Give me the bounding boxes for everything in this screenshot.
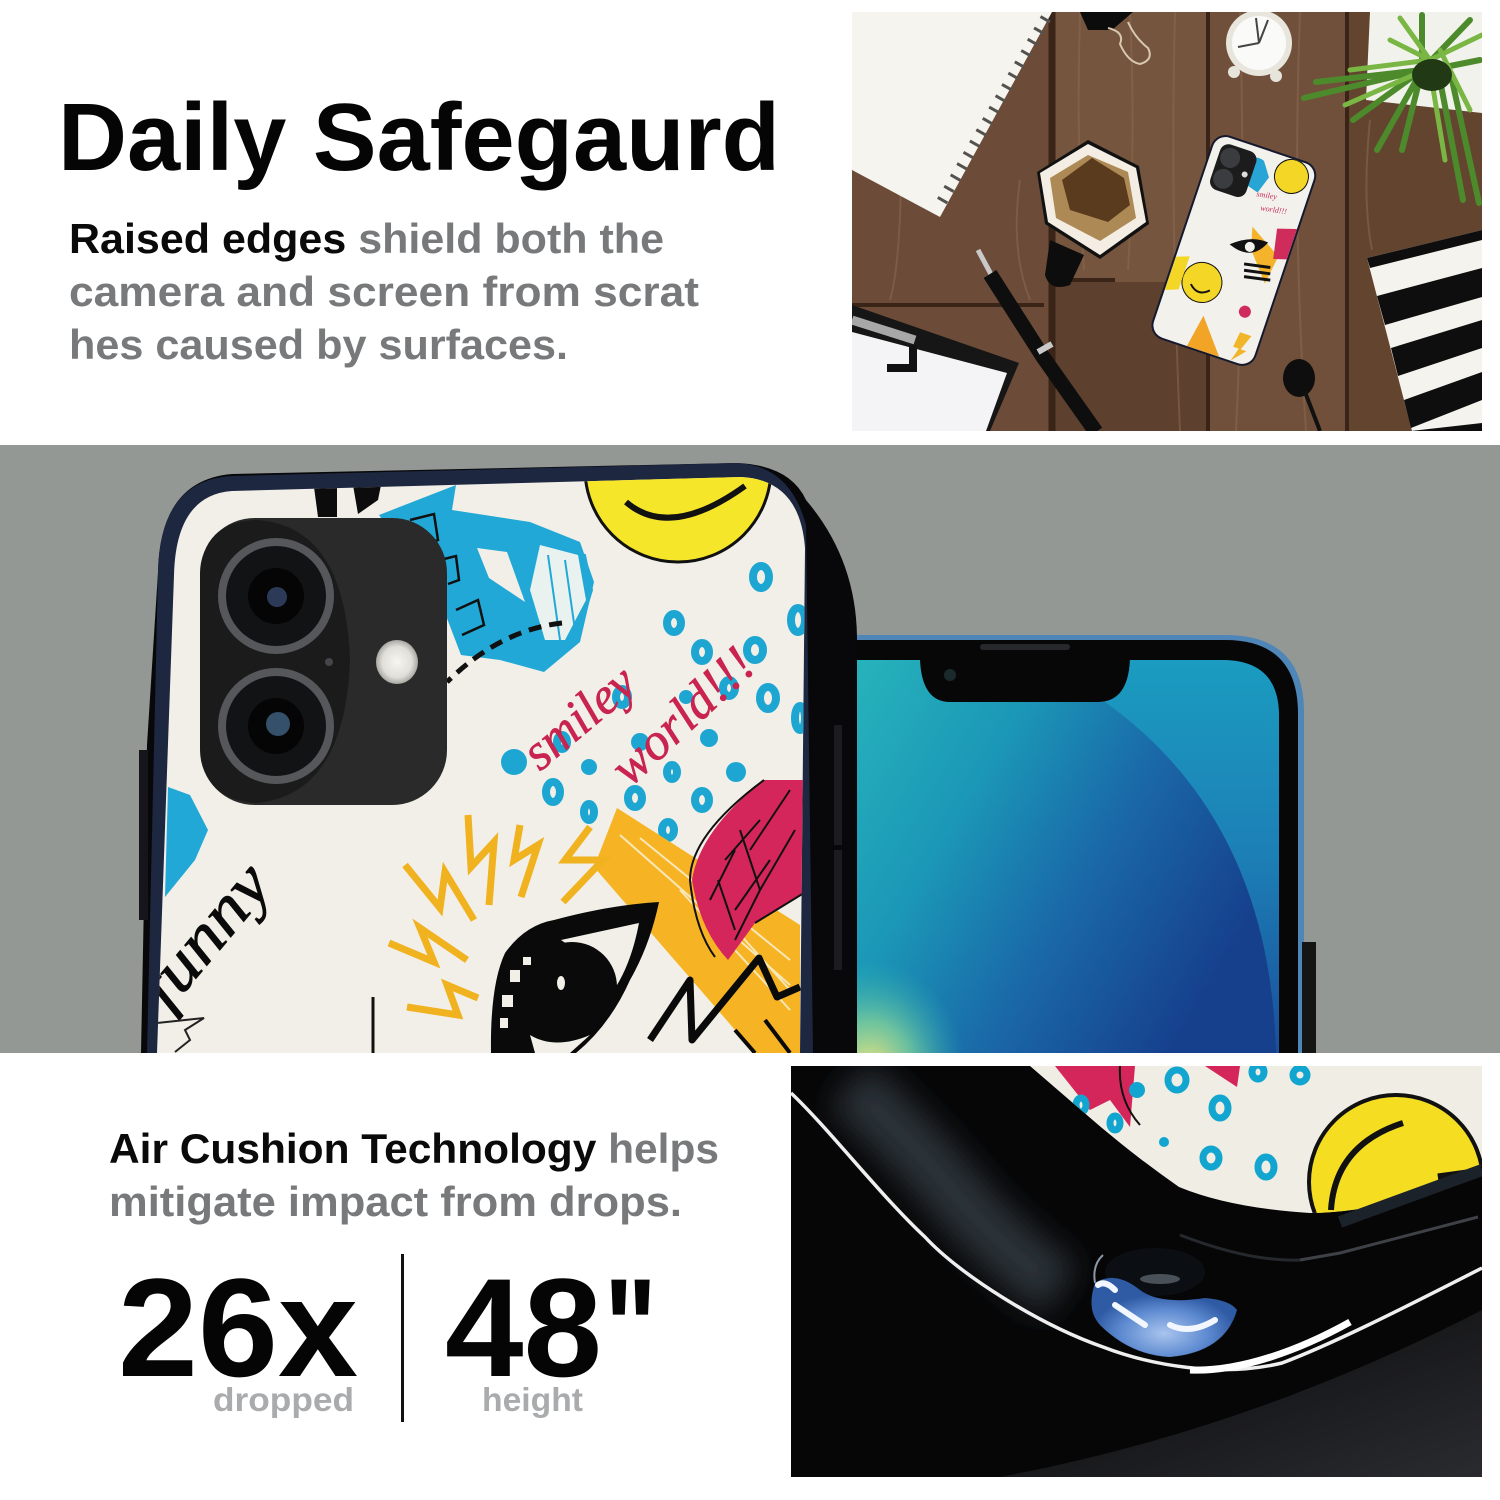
clipboard — [852, 305, 1019, 431]
eye — [491, 902, 659, 1053]
smiley — [584, 477, 772, 564]
text block: raised edges — [69, 215, 699, 368]
flash — [376, 640, 418, 684]
wing doodle — [157, 1018, 204, 1052]
phone on desk: world!!! — [1260, 203, 1288, 216]
camera module — [200, 518, 447, 805]
divider — [401, 1254, 404, 1422]
artwork corner — [1030, 1066, 1482, 1213]
coffee cup — [1037, 140, 1149, 287]
text block: air cushion — [109, 1125, 719, 1225]
phone back: case — [139, 463, 857, 1053]
panel: desk photo — [852, 10, 1482, 432]
notebook — [852, 12, 1052, 217]
panel: bumper close-up — [791, 1065, 1483, 1477]
water droplet — [1091, 1248, 1237, 1357]
title: Daily Safegaurd — [58, 84, 780, 191]
yellow strokes — [594, 808, 800, 1053]
text block: raised edges: camera and screen from scrat — [69, 268, 699, 315]
earphone — [1283, 359, 1320, 431]
lightning — [389, 815, 603, 1015]
case artwork: world!!! — [599, 636, 766, 797]
dots — [546, 566, 805, 838]
phone on desk: smiley — [1256, 189, 1278, 201]
stat: 48 inches height — [445, 1249, 657, 1418]
feather — [690, 780, 804, 960]
clock — [1226, 10, 1292, 82]
stat: 48 inches height: " — [604, 1249, 657, 1406]
stat: 48 inches height: 48 — [445, 1249, 602, 1406]
lettering: smiley — [511, 653, 648, 781]
zigzag scribble — [650, 958, 800, 1040]
pen — [978, 250, 1096, 432]
stat: 26x dropped: 26x — [118, 1249, 358, 1406]
case artwork — [158, 477, 804, 1053]
lens: top — [222, 542, 330, 650]
funny lettering: funny — [124, 848, 286, 1022]
phone on desk — [1147, 131, 1320, 370]
bumper highlights — [1340, 1170, 1482, 1222]
blue brush — [379, 485, 594, 672]
text block: raised edges: Raised edges shield both the — [69, 215, 664, 262]
panel: grey phone band — [0, 445, 1500, 1053]
binder clip — [1080, 12, 1150, 64]
plant — [1304, 12, 1482, 203]
lens: bottom — [222, 672, 330, 780]
striped notebook — [1367, 230, 1482, 431]
stat: 26x dropped: dropped — [213, 1381, 354, 1418]
stat: 48 inches height: height — [482, 1381, 583, 1418]
text block: raised edges: hes caused by surfaces. — [69, 321, 568, 368]
text block: air cushion: mitigate impact from drops. — [109, 1178, 682, 1225]
text block: air cushion: Air Cushion Technology helps — [109, 1125, 719, 1172]
phone front: screen — [857, 635, 1316, 1053]
